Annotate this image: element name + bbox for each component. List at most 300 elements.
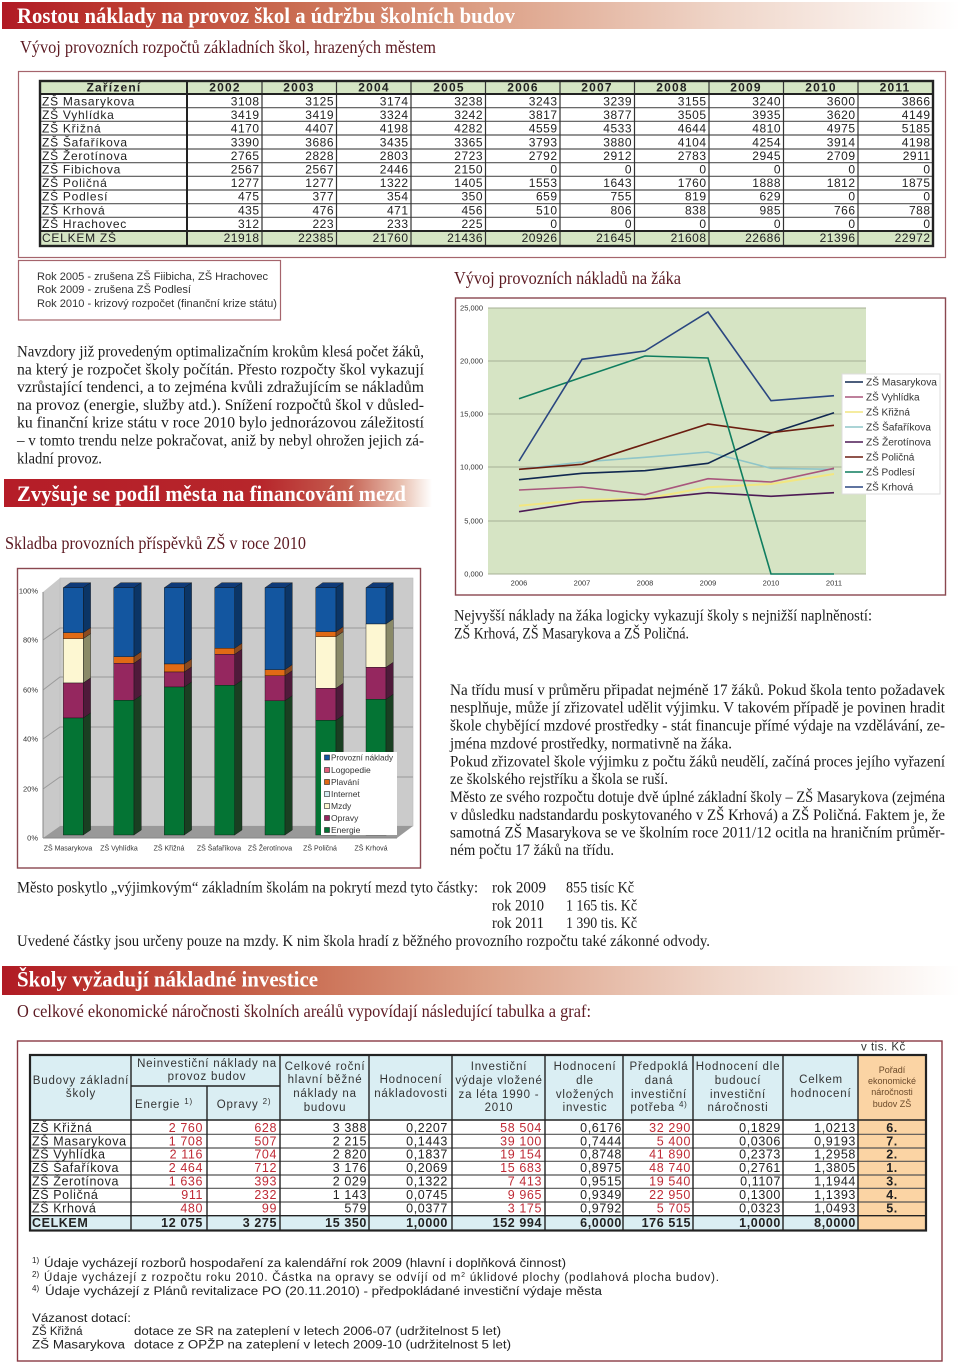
ranking values: 2. [886, 1148, 898, 1162]
table header row: 2009 [730, 80, 762, 94]
chart legend: ZŠ Podlesí [866, 466, 915, 478]
black calculated values: 0,2373 [739, 1148, 781, 1162]
table values: 3817 [529, 108, 558, 122]
table values: 21760 [373, 231, 408, 245]
line chart: cost per pupil [456, 298, 946, 595]
banner: investments heading: Školy vyžadují nákladné investice [17, 966, 318, 992]
bar: ZŠ Masarykova [63, 583, 91, 835]
table values: 3877 [603, 108, 632, 122]
table values: 2446 [380, 163, 408, 177]
black calculated values [333, 1121, 856, 1216]
table values: 2709 [827, 149, 856, 163]
black calculated values: 2 029 [333, 1175, 367, 1189]
table header: hodnocení [791, 1088, 851, 1100]
y axis labels [19, 586, 38, 842]
black calculated values: 1,1393 [814, 1188, 856, 1202]
red cost values: 2 464 [169, 1161, 203, 1175]
footnotes [32, 1256, 719, 1298]
table values: 22385 [298, 231, 334, 245]
red cost values: 2 760 [169, 1121, 203, 1135]
table header: Celkové roční [285, 1061, 365, 1073]
table values: 0 [774, 217, 781, 231]
table header: 4) [679, 1100, 688, 1109]
table school names: ZŠ Masarykova [42, 93, 135, 108]
school names: ZŠ Šafaříkova [32, 1160, 119, 1175]
table values: 0 [848, 190, 856, 204]
table values: 4810 [752, 122, 781, 136]
black calculated values: 1,1944 [814, 1175, 856, 1189]
school names: ZŠ Krhová [32, 1200, 96, 1216]
chart legend: ZŠ Křižná [866, 406, 910, 418]
y axis labels: 10,000 [460, 462, 483, 472]
table values: 2828 [305, 149, 334, 163]
totals row: 3 275 [243, 1216, 277, 1230]
x axis labels: 2011 [826, 578, 842, 588]
x axis labels: 2007 [574, 578, 590, 588]
text block: exceptional wage contributions: rok 2010 [492, 898, 544, 915]
footnotes: Údaje vycházejí z rozpočtu roku 2010. Částka na opravy se odvíjí od m [44, 1272, 460, 1284]
red cost values: 480 [180, 1202, 203, 1216]
school names: ZŠ Vyhlídka [32, 1146, 106, 1162]
text block: falling pupil numbers [16, 344, 425, 467]
banner: city share of wages: Zvyšuje se podíl města na financování mezd [17, 481, 406, 506]
category labels: ZŠ Žerotínova [248, 844, 292, 852]
bar: ZŠ Žerotínova [265, 583, 292, 835]
footnotes: Údaje vycházejí z Plánů revitalizace PO (20.11.2010) - předpokládané investiční výdaje města [45, 1285, 603, 1298]
table school names [42, 93, 135, 245]
table values: 3125 [305, 94, 334, 108]
table values: 3243 [529, 94, 558, 108]
table header: 1) [184, 1097, 193, 1106]
bar: ZŠ Vyhlídka [114, 583, 141, 835]
category labels: ZŠ Masarykova [44, 844, 92, 852]
table header: provoz budov [168, 1071, 246, 1083]
table values: 2912 [603, 149, 632, 163]
red cost values: 32 290 [649, 1121, 691, 1135]
table school names: ZŠ Žerotínova [42, 148, 128, 163]
table values: 4198 [902, 135, 930, 149]
text block: exceptional wage contributions: Město poskytlo „výjimkovým“ základním školám na pokrytí mezd tyto částky: [17, 880, 478, 897]
black calculated values: 0,1300 [739, 1188, 781, 1202]
chart legend: ZŠ Šafaříkova [866, 420, 931, 434]
table values: 819 [685, 190, 706, 204]
red cost values: 3 175 [508, 1202, 542, 1216]
y axis labels: 5,000 [464, 516, 483, 526]
table values: 1760 [678, 176, 706, 190]
subtitle: cost per pupil: Vývoj provozních nákladů na žáka [454, 268, 681, 288]
table values: 21396 [820, 231, 856, 245]
unit note: v tis. Kč [861, 1042, 906, 1054]
subtitle: contribution structure: Skladba provozních příspěvků ZŠ v roce 2010 [5, 532, 306, 553]
bar: ZŠ Šafaříkova [215, 583, 242, 835]
text block: falling pupil numbers: na provoz (energie, služby atd.). Snížení rozpočtů škol v důsled- [17, 397, 424, 414]
chart legend: Mzdy [331, 801, 352, 811]
chart legend: ZŠ Žerotínova [866, 436, 931, 448]
table values: 0 [550, 163, 558, 177]
table school names: ZŠ Poličná [42, 175, 108, 190]
subtitle: budget development: Vývoj provozních rozpočtů základních škol, hrazených městem [20, 37, 436, 57]
y axis labels: 0,000 [464, 570, 483, 578]
table values: 3239 [603, 94, 632, 108]
red cost values: 5 400 [657, 1134, 691, 1148]
text block: exceptional wage contributions: 1 390 tis. Kč [566, 915, 637, 932]
black calculated values: 0,9792 [580, 1202, 622, 1216]
table values: 0 [699, 217, 706, 231]
black calculated values: 0,2761 [739, 1161, 781, 1175]
school names: ZŠ Masarykova [32, 1134, 127, 1148]
note box: budget events: Rok 2009 - zrušena ZŠ Podlesí [37, 283, 191, 296]
banner: main heading [2, 2, 960, 29]
school names: CELKEM [32, 1216, 88, 1230]
red cost values: 507 [254, 1134, 277, 1148]
table values: 1553 [529, 176, 558, 190]
chart legend: Logopedie [331, 765, 371, 775]
ranking column header: budov ZŠ [873, 1099, 911, 1109]
table values: 3793 [529, 135, 558, 149]
table values: 1322 [380, 176, 408, 190]
black calculated values: 0,1322 [406, 1175, 448, 1189]
table header row [87, 80, 910, 94]
black calculated values: 1,3805 [814, 1161, 856, 1175]
text block: falling pupil numbers: Navzdory již provedeným optimalizačním krokům klesá počet žáků, [17, 344, 424, 361]
table header: Investiční [471, 1061, 527, 1073]
table values: 4533 [603, 122, 632, 136]
black calculated values: 579 [344, 1202, 367, 1216]
table header: Opravy [217, 1099, 259, 1111]
table values: 4407 [305, 122, 334, 136]
subtitle: economic demand: O celkové ekonomické náročnosti školních areálů vypovídají následující tabulka a graf: [17, 1001, 591, 1021]
y axis labels: 20% [23, 784, 38, 794]
table header row: 2005 [433, 80, 465, 94]
table values: 22686 [745, 231, 781, 245]
table values: 5185 [902, 122, 930, 136]
grant commitments: dotace z OPŽP na zateplení v letech 2009-10 (udržitelnost 5 let) [134, 1338, 511, 1352]
text block: falling pupil numbers: – v tomto trendu nelze pokračovat, aniž by nebyl ohrožen jejich zá- [16, 432, 424, 449]
red cost values: 19 154 [500, 1148, 542, 1162]
bar: ZŠ Krhová [366, 583, 393, 835]
chart legend: Provozní náklady [331, 752, 394, 762]
table header row: Zařízení [87, 80, 141, 94]
table values: 2792 [529, 149, 558, 163]
black calculated values: 2 820 [333, 1148, 367, 1162]
table header: potřeba [630, 1102, 675, 1114]
y axis labels: 0% [27, 834, 38, 842]
category labels: ZŠ Krhová [354, 844, 388, 852]
grant commitments: ZŠ Křižná [32, 1325, 83, 1338]
note box: budget events: Rok 2005 - zrušena ZŠ Fiibicha, ZŠ Hrachovec [37, 270, 268, 283]
table values: 0 [699, 163, 706, 177]
table values: 3620 [827, 108, 856, 122]
text block: exceptional wage contributions: rok 2011 [492, 915, 544, 932]
table header: budovu [304, 1102, 346, 1114]
table values: 3435 [380, 135, 408, 149]
black calculated values: 0,1837 [406, 1148, 448, 1162]
table header row: 2002 [209, 80, 241, 94]
chart legend: Energie [331, 825, 361, 835]
chart legend [842, 374, 940, 494]
table school names: ZŠ Krhová [42, 202, 105, 217]
banner: investments heading [2, 966, 960, 995]
footnotes: 2 [461, 1272, 465, 1279]
text block: falling pupil numbers: vzrůstající tendenci, a to zejména kvůli zdražujícím se nákladům [17, 379, 424, 396]
bar: ZŠ Křižná [164, 583, 192, 835]
table values: 985 [759, 203, 781, 217]
red cost values: 1 708 [169, 1134, 203, 1148]
chart legend: ZŠ Vyhlídka [866, 390, 920, 404]
table values: 3505 [678, 108, 706, 122]
table values: 3390 [231, 135, 260, 149]
table values: 766 [834, 203, 856, 217]
totals row: 152 994 [493, 1216, 542, 1230]
table values: 0 [625, 163, 632, 177]
table values: 1405 [454, 176, 483, 190]
table header: hlavní běžné [288, 1074, 362, 1086]
table values: 377 [312, 190, 334, 204]
y axis labels: 60% [23, 686, 38, 694]
red cost values: 99 [262, 1202, 277, 1216]
totals row: 6,0000 [580, 1216, 622, 1230]
black calculated values: 0,2207 [406, 1121, 448, 1135]
table values: 476 [312, 203, 334, 217]
text block: falling pupil numbers: na který je rozpočet školy počítán. Přesto rozpočty škol vykazují [17, 361, 425, 378]
black calculated values: 0,9193 [814, 1134, 856, 1148]
table school names: ZŠ Vyhlídka [42, 107, 114, 122]
chart legend: ZŠ Krhová [866, 480, 914, 494]
red cost values: 712 [254, 1161, 277, 1175]
table header: školy [66, 1088, 96, 1100]
x axis labels: 2010 [763, 578, 779, 588]
red cost values: 1 636 [169, 1175, 203, 1189]
table values: 0 [923, 163, 930, 177]
table values: 2765 [231, 149, 260, 163]
table values [224, 94, 930, 245]
table values: 1812 [827, 176, 856, 190]
table values: 0 [625, 217, 632, 231]
black calculated values: 0,1107 [740, 1175, 781, 1189]
table values: 3880 [603, 135, 632, 149]
table header row: 2007 [581, 80, 613, 94]
red cost values: 58 504 [500, 1121, 542, 1135]
category labels: ZŠ Poličná [303, 844, 337, 852]
table values: 0 [923, 190, 930, 204]
table values: 1875 [902, 176, 930, 190]
ranking values: 3. [886, 1175, 898, 1189]
table values: 0 [774, 163, 781, 177]
table values: 22972 [895, 231, 930, 245]
black calculated values: 1,0493 [814, 1202, 856, 1216]
category labels [44, 844, 388, 852]
table values: 475 [238, 190, 260, 204]
table values: 0 [848, 217, 856, 231]
table values: 1277 [305, 176, 334, 190]
table values: 4644 [678, 122, 706, 136]
table values: 4104 [678, 135, 706, 149]
text block: exceptional wage contributions: rok 2009 [492, 880, 546, 897]
text block: exceptional wage contributions: Uvedené částky jsou určeny pouze na mzdy. K nim škola hradí z běžného provozního rozpočtu také zákonné odvody. [17, 933, 710, 950]
totals row: 176 515 [642, 1216, 691, 1230]
table values: 510 [536, 203, 558, 217]
table values: 659 [536, 190, 558, 204]
table values: 2911 [903, 149, 930, 163]
table values: 3866 [902, 94, 930, 108]
text block: class size rules: jména mzdové prostředky, normativně na žáka. [449, 736, 732, 753]
table header: Energie [135, 1099, 180, 1111]
footnotes: 2) [32, 1270, 39, 1279]
table header: Budovy základní [33, 1075, 129, 1087]
table values: 1888 [752, 176, 781, 190]
ranking values: 6. [886, 1121, 898, 1135]
table values: 0 [848, 163, 856, 177]
ranking values: 7. [886, 1134, 898, 1148]
table header: investic [563, 1102, 607, 1114]
grant commitments [32, 1313, 511, 1352]
ranking values: 4. [886, 1188, 898, 1202]
table values: 3240 [752, 94, 781, 108]
table values: 4975 [827, 122, 856, 136]
red cost values: 2 116 [170, 1148, 203, 1162]
table school names: ZŠ Fibichova [42, 162, 121, 177]
grant commitments: ZŠ Masarykova [32, 1338, 126, 1352]
red cost values: 393 [254, 1175, 277, 1189]
text block: class size rules: v důsledku nadstandardu poskytovaného v ZŠ Krhová) a ZŠ Poličná. Faktem je, že [450, 807, 945, 824]
note box: budget events: Rok 2010 - krizový rozpočet (finanční krize státu) [37, 298, 277, 310]
red cost values: 39 100 [500, 1134, 542, 1148]
black calculated values: 0,2069 [406, 1161, 448, 1175]
table values: 4149 [902, 108, 930, 122]
chart legend: ZŠ Masarykova [866, 376, 937, 388]
chart legend [321, 752, 397, 835]
red cost values: 15 683 [500, 1161, 542, 1175]
black calculated values: 0,0377 [406, 1202, 448, 1216]
ranking values: 5. [886, 1202, 898, 1216]
table values: 354 [387, 190, 408, 204]
black calculated values: 1,2958 [814, 1148, 856, 1162]
table header: 2) [263, 1097, 271, 1106]
table values: 755 [610, 190, 632, 204]
table values: 3155 [678, 94, 706, 108]
table values: 2783 [678, 149, 706, 163]
red cost values: 232 [254, 1188, 277, 1202]
table header: vložených [556, 1089, 614, 1101]
totals row: 1,0000 [406, 1216, 448, 1230]
table values: 21608 [671, 231, 706, 245]
y axis labels: 40% [23, 734, 38, 744]
text block: exceptional wage contributions: 1 165 tis. Kč [566, 898, 637, 915]
table header [33, 1058, 851, 1114]
footnotes: Údaje vycházejí rozborů hospodaření za kalendářní rok 2009 (hlavní i doplňková činnost) [44, 1257, 566, 1270]
school names [32, 1120, 127, 1230]
red cost values: 41 890 [649, 1148, 691, 1162]
school names: ZŠ Poličná [32, 1187, 98, 1202]
panel: stacked bar chart [18, 568, 420, 868]
note box: budget events [18, 260, 280, 320]
table header: náklady na [293, 1088, 357, 1100]
text block: class size rules: škole chybějící mzdové prostředky - stát financuje přímé výdaje na vzdělávání, ze- [450, 718, 945, 735]
chart legend: Opravy [331, 813, 359, 823]
table values: 2803 [380, 149, 408, 163]
black calculated values: 0,6176 [580, 1121, 622, 1135]
table values: 4170 [231, 122, 260, 136]
y axis labels [460, 304, 483, 578]
totals row [161, 1216, 856, 1230]
table school names: ZŠ Hrachovec [42, 216, 127, 231]
table values: 788 [909, 203, 930, 217]
table header: Neinvestiční náklady na [137, 1058, 277, 1070]
table values: 0 [923, 217, 930, 231]
black calculated values: 3 388 [333, 1121, 367, 1135]
table values: 4198 [380, 122, 408, 136]
table values: 1277 [231, 176, 260, 190]
text block: exceptional wage contributions: 855 tisíc Kč [566, 880, 634, 897]
ranking values: 1. [886, 1161, 898, 1175]
red cost values: 9 965 [508, 1188, 542, 1202]
y axis labels: 80% [23, 636, 38, 644]
table values: 3324 [380, 108, 408, 122]
table values: 2150 [454, 163, 483, 177]
black calculated values: 0,0323 [739, 1202, 781, 1216]
totals row: 15 350 [325, 1216, 367, 1230]
table values: 629 [759, 190, 781, 204]
table header: Hodnocení [380, 1074, 442, 1086]
chart legend: Plavání [331, 777, 360, 787]
table values: 3935 [752, 108, 781, 122]
chart legend: Internet [331, 789, 360, 799]
table values: 4254 [752, 135, 781, 149]
table header: Předpoklá [630, 1061, 688, 1073]
table values: 2945 [752, 149, 781, 163]
table header: investiční [710, 1089, 766, 1101]
table values: 3242 [454, 108, 483, 122]
text block: class size rules: nesplňuje, může jí zřizovatel udělit výjimku. V takovém případě je povinen hradit [450, 700, 946, 717]
chart legend: ZŠ Poličná [866, 450, 915, 464]
table header: investiční [631, 1089, 687, 1101]
text block: highest cost schools: Nejvyšší náklady na žáka logicky vykazují školy s nejnižší naplněností: [454, 608, 872, 625]
table values: 20926 [522, 231, 558, 245]
table header: budoucí [715, 1075, 761, 1087]
table values: 1643 [603, 176, 632, 190]
table values: 3419 [231, 108, 260, 122]
black calculated values: 1,0213 [814, 1121, 856, 1135]
text block: class size rules: ze školského rejstříku a škola se ruší. [450, 771, 668, 788]
bar: ZŠ Poličná [316, 583, 343, 835]
table values: 3600 [827, 94, 856, 108]
red cost values: 911 [181, 1188, 203, 1202]
table values: 4559 [529, 122, 558, 136]
text block: highest cost schools [454, 608, 872, 642]
text block: exceptional wage contributions [17, 880, 710, 950]
table values: 223 [312, 217, 334, 231]
red cost values: 22 950 [649, 1188, 691, 1202]
red cost values: 7 413 [508, 1175, 542, 1189]
black calculated values: 0,9349 [580, 1188, 622, 1202]
text block: class size rules: samotná ZŠ Masarykova se ve školním roce 2011/12 ocitla na hraničním průměr- [450, 825, 945, 842]
black calculated values: 0,1443 [406, 1134, 448, 1148]
table header: za léta 1990 - [459, 1089, 539, 1101]
panel: school budgets table [18, 72, 946, 258]
table header: nákladovosti [374, 1088, 448, 1100]
banner: main heading: Rostou náklady na provoz škol a údržbu školních budov [17, 3, 515, 28]
table values: 3365 [454, 135, 483, 149]
table values: 2567 [231, 163, 260, 177]
table header: Celkem [799, 1074, 843, 1086]
black calculated values: 0,1829 [739, 1121, 781, 1135]
table header row: 2010 [805, 80, 837, 94]
table values: 4282 [454, 122, 483, 136]
table header: Hodnocení [554, 1061, 616, 1073]
table values: 2723 [454, 149, 483, 163]
red cost values: 628 [254, 1121, 277, 1135]
black calculated values: 0,9515 [580, 1175, 622, 1189]
